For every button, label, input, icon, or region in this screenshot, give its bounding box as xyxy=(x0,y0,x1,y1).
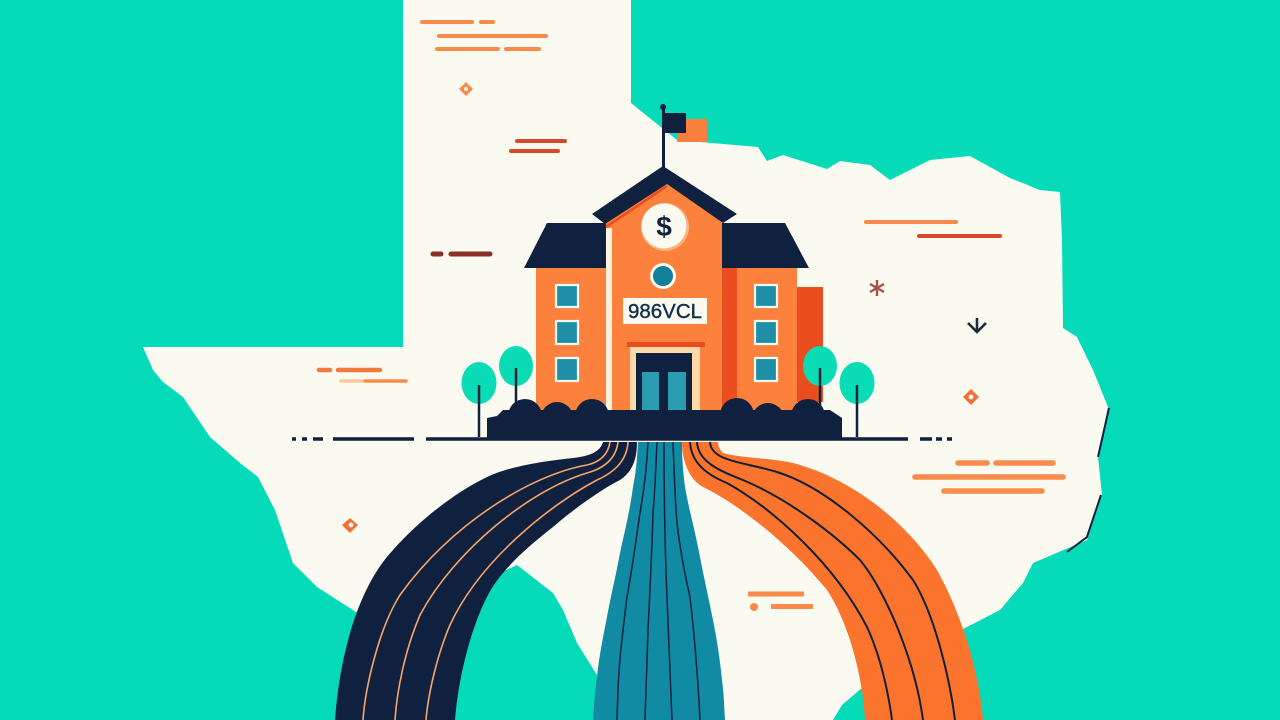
orange ribbon xyxy=(682,442,983,720)
central tower xyxy=(606,178,722,414)
Texas map shape xyxy=(143,0,1108,720)
text-like marks: bottom center xyxy=(748,594,813,611)
main roof xyxy=(592,166,737,224)
side roofs xyxy=(524,223,809,268)
ground line xyxy=(292,437,952,441)
navy ribbon xyxy=(335,442,637,720)
text-like marks: left xyxy=(319,370,406,381)
diamond: upper left xyxy=(459,82,473,96)
right wing xyxy=(722,268,797,414)
text-like marks: red xyxy=(511,141,565,151)
shrubs and base xyxy=(487,398,842,440)
sign: 986VCL xyxy=(628,301,702,323)
round window xyxy=(650,263,676,289)
text-like marks: dark red xyxy=(433,252,490,256)
text-like marks: right xyxy=(915,463,1063,491)
text-like marks: top left xyxy=(422,22,546,49)
left windows xyxy=(556,285,578,381)
flag xyxy=(660,104,707,168)
teal ribbon xyxy=(593,442,725,720)
diamond: lower left xyxy=(342,518,358,533)
left wing xyxy=(536,268,606,414)
text-like marks: upper right xyxy=(866,222,1000,236)
entrance xyxy=(627,342,705,414)
icon: down arrow xyxy=(968,318,986,332)
clock with dollar sign xyxy=(641,203,689,251)
Texas east edge shadow xyxy=(1067,408,1109,552)
school building xyxy=(524,166,823,414)
red side annex xyxy=(797,287,823,402)
trees xyxy=(462,346,874,437)
right windows xyxy=(755,285,777,381)
icon: asterisk xyxy=(870,280,884,296)
clock with dollar sign: $ xyxy=(656,211,672,242)
diamond: right xyxy=(963,389,979,405)
